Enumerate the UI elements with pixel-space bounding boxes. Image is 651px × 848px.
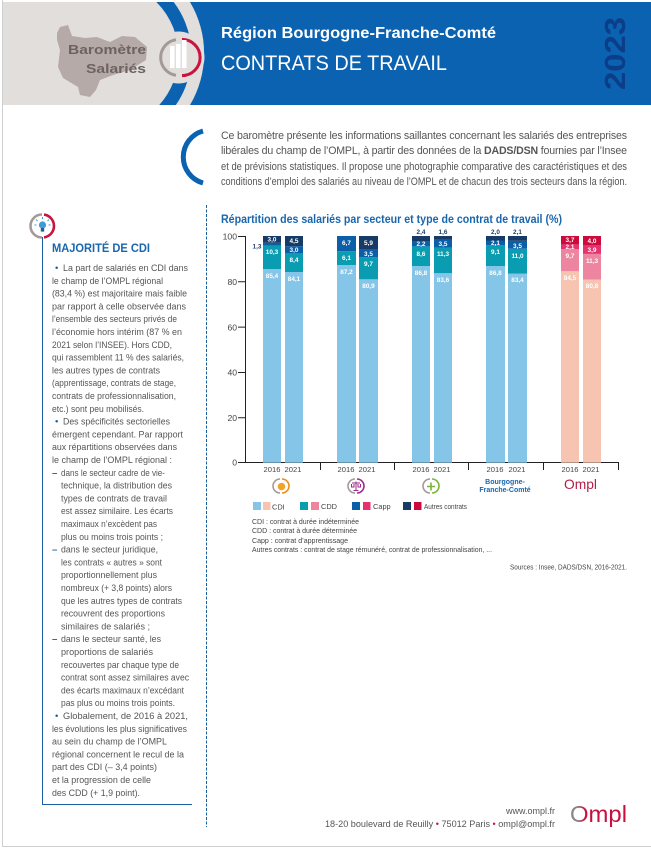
- bars: santé: 86,8: [415, 270, 428, 277]
- bars: Bourgogne-Franche-Comté: 86,8: [489, 270, 502, 277]
- panel text: [52, 263, 189, 799]
- bars: cadre de vie-technique: 1,3: [253, 244, 262, 250]
- panel text: dans le secteur juridique,: [61, 545, 158, 556]
- panel text: part des CDI (– 3,4 points): [52, 762, 157, 773]
- bars: OMPL: 2,1: [566, 244, 575, 251]
- panel text: contrat sont assez similaires avec: [61, 673, 189, 684]
- bars: Bourgogne-Franche-Comté: 2,0: [491, 229, 500, 236]
- bars: cadre de vie-technique: 3,0: [268, 236, 277, 244]
- panel text: Des spécificités sectorielles: [63, 417, 170, 428]
- panel text: (83,4 %) est majoritaire mais faible: [52, 289, 187, 300]
- legend: Capp: [373, 502, 391, 511]
- bars: cadre de vie-technique: 8,4: [290, 257, 299, 264]
- barometer label: [68, 42, 146, 76]
- legend: CDD: [321, 502, 337, 511]
- panel text: La part de salariés en CDI dans: [63, 263, 188, 274]
- panel text: régional concernent le recul de la: [52, 749, 185, 760]
- panel text: technique, la distribution des: [61, 481, 172, 492]
- panel text: plus ou moins trois points ;: [61, 532, 163, 543]
- panel text: •: [55, 711, 58, 722]
- bars: santé: 11,3: [437, 251, 449, 258]
- contract definitions: CDD : contrat à durée déterminée: [252, 526, 357, 535]
- bars: Bourgogne-Franche-Comté: 2,1: [513, 229, 522, 236]
- contract definitions: Autres contrats : contrat de stage rémunéré, contrat de professionnalisation, ...: [252, 545, 492, 554]
- panel text: –: [52, 468, 58, 479]
- bars: Bourgogne-Franche-Comté: 3,5: [513, 243, 522, 250]
- panel text: similaires de salariés ;: [61, 621, 150, 632]
- panel text: les contrats « autres » sont: [61, 557, 162, 568]
- panel text: le champ de l’OMPL régional :: [52, 455, 172, 466]
- panel text: Globalement, de 2016 à 2021,: [63, 711, 188, 722]
- bars: santé: [412, 229, 452, 463]
- sources: Sources : Insee, DADS/DSN, 2016-2021.: [510, 564, 627, 572]
- contract definitions: [252, 517, 492, 554]
- bars: santé: 2,4: [417, 229, 426, 236]
- panel text: et la progression de celle: [52, 775, 151, 786]
- year labels: 2021: [509, 465, 525, 474]
- panel heading: MAJORITÉ DE CDI: [52, 240, 150, 255]
- panel text: par rapport à celle observée dans: [52, 301, 186, 312]
- intro text: Ce baromètre présente les informations saillantes concernant les salariés des entreprises: [221, 130, 627, 142]
- bars: juridique: [337, 236, 378, 463]
- bars: santé: 8,6: [417, 251, 426, 258]
- bars: juridique: 87,2: [340, 269, 353, 276]
- legend: CDI: [272, 502, 285, 512]
- panel text: contrats de professionnalisation,: [52, 391, 176, 402]
- year labels: 2016: [413, 465, 429, 474]
- panel text: les autres types de contrats: [52, 365, 160, 376]
- panel text: dans le secteur cadre de vie-: [61, 468, 165, 479]
- panel text: –: [52, 634, 58, 645]
- bars: Bourgogne-Franche-Comté: 83,4: [511, 277, 524, 284]
- bar chart: [223, 229, 618, 474]
- header banner: [3, 2, 651, 105]
- icon: juridique: [348, 479, 364, 493]
- bars: santé: 1,6: [439, 229, 448, 236]
- footer contact: 18-20 boulevard de Reuilly • 75012 Paris • ompl@ompl.fr: [325, 819, 556, 830]
- year labels: 2021: [583, 465, 599, 474]
- footer contact: [325, 806, 556, 830]
- panel text: les évolutions les plus significatives: [52, 724, 187, 735]
- icon: barometer ring: [161, 39, 200, 76]
- bars: OMPL: [561, 236, 601, 463]
- bars: OMPL: 80,8: [586, 283, 599, 290]
- intro text: [221, 130, 627, 188]
- panel text: des CDD (+ 1,9 point).: [52, 788, 140, 799]
- panel text: recouvrent des proportions: [61, 609, 165, 620]
- panel text: types de contrats de travail: [61, 493, 167, 504]
- panel text: proportionnellement plus: [61, 570, 157, 581]
- y axis: 40: [227, 368, 237, 378]
- panel text: qui rassemblent 11 % des salariés,: [52, 353, 184, 364]
- panel text: –: [52, 545, 58, 556]
- bars: cadre de vie-technique: 84,1: [288, 276, 301, 283]
- panel: majorité de CDI: [30, 214, 192, 804]
- panel text: (apprentissage, contrats de stage,: [52, 378, 176, 389]
- panel text: le champ de l’OMPL régional: [52, 276, 163, 287]
- panel text: proportions de salariés: [61, 647, 153, 658]
- panel text: émergent cependant. Par rapport: [52, 429, 183, 440]
- y axis: 0: [232, 458, 237, 468]
- panel text: est assez similaire. Les écarts: [61, 506, 173, 517]
- document title: CONTRATS DE TRAVAIL: [221, 52, 447, 75]
- panel text: que les autres types de contrats: [61, 596, 182, 607]
- y axis: 100: [223, 232, 237, 242]
- bars: cadre de vie-technique: 85,4: [266, 273, 279, 280]
- panel text: dans le secteur santé, les: [61, 634, 161, 645]
- bars: cadre de vie-technique: 3,0: [290, 247, 299, 254]
- panel text: des écarts maximaux n’excédant: [61, 685, 184, 696]
- bars: Bourgogne-Franche-Comté: 11,0: [511, 253, 524, 260]
- panel text: maximaux n’excèdent pas: [61, 519, 157, 530]
- bars: cadre de vie-technique: [253, 236, 303, 463]
- panel text: au sein du champ de l’OMPL: [52, 737, 168, 748]
- panel text: •: [55, 417, 58, 428]
- y axis: [223, 232, 618, 470]
- bars: Bourgogne-Franche-Comté: 9,1: [491, 249, 500, 256]
- bars: santé: 83,6: [437, 277, 450, 284]
- panel text: recouvertes par chaque type de: [61, 660, 179, 671]
- bars: OMPL: 4,0: [588, 238, 597, 245]
- bars: cadre de vie-technique: 4,5: [290, 238, 299, 245]
- panel text: l’ensemble des secteurs privés de: [52, 314, 177, 325]
- bars: juridique: 6,1: [342, 255, 351, 262]
- logo: OMPL footer: Ompl: [570, 801, 627, 827]
- bars: OMPL: 3,7: [566, 237, 575, 244]
- label: Bourgogne-Franche-Comté: Franche-Comté: [479, 487, 531, 494]
- bars: juridique: 6,7: [342, 240, 351, 247]
- year labels: 2021: [359, 465, 375, 474]
- year labels: 2016: [562, 465, 578, 474]
- panel text: aux répartitions observées dans: [52, 442, 177, 453]
- bars: santé: 2,2: [417, 241, 426, 248]
- year labels: 2016: [264, 465, 280, 474]
- bars: cadre de vie-technique: 10,3: [266, 249, 279, 256]
- legend: Autres contrats: [424, 502, 467, 511]
- region heading: Région Bourgogne-Franche-Comté: [221, 25, 496, 42]
- intro text: libérales du champ de l’OMPL, à partir des données de la DADS/DSN fournies par l’Insee: [221, 145, 627, 157]
- panel text: 2021 selon l’INSEE). Hors CDD,: [52, 340, 172, 351]
- label: Bourgogne-Franche-Comté: Bourgogne-: [485, 479, 525, 486]
- bars: juridique: 5,9: [364, 240, 373, 247]
- bars: OMPL: 3,9: [588, 247, 597, 254]
- footer contact: www.ompl.fr: [505, 806, 556, 817]
- bars: OMPL: 9,7: [566, 253, 575, 260]
- year labels: 2021: [285, 465, 301, 474]
- panel text: nombreux (+ 3,8 points) alors: [61, 583, 172, 594]
- bars: juridique: 3,5: [364, 251, 373, 258]
- barometer label: Baromètre: [68, 42, 146, 57]
- panel text: etc.) sont peu mobilisés.: [52, 404, 144, 415]
- bars: Bourgogne-Franche-Comté: 2,1: [491, 240, 500, 247]
- year labels: 2021: [434, 465, 450, 474]
- icon: santé: [423, 479, 439, 493]
- barometer label: Salariés: [86, 61, 146, 76]
- bars: santé: 3,5: [439, 241, 448, 248]
- bars: Bourgogne-Franche-Comté: [486, 229, 527, 463]
- year labels: 2016: [487, 465, 503, 474]
- bars: juridique: 80,9: [362, 283, 375, 290]
- panel text: •: [55, 263, 58, 274]
- chart title: Répartition des salariés par secteur et type de contrat de travail (%): [221, 212, 562, 226]
- icon: cadre de vie-technique: [273, 479, 289, 493]
- panel text: pas plus ou moins trois points.: [61, 698, 175, 709]
- year labels: [264, 465, 599, 474]
- y axis: 60: [227, 322, 237, 332]
- icon: lightbulb: [30, 214, 54, 238]
- legend: [253, 502, 467, 512]
- icon: region map: [57, 25, 147, 97]
- y axis: 20: [227, 413, 237, 423]
- label: Bourgogne-Franche-Comté: [479, 479, 531, 494]
- icon: intro bracket arc: [183, 131, 203, 183]
- year labels: 2016: [338, 465, 354, 474]
- logo: OMPL in chart: Ompl: [564, 476, 597, 492]
- year: 2023: [600, 17, 632, 90]
- contract definitions: CDI : contrat à durée indéterminée: [252, 517, 359, 526]
- panel text: l’économie hors intérim (87 % en: [52, 327, 182, 338]
- bars: OMPL: 11,3: [586, 258, 598, 265]
- dashed separator: [206, 205, 208, 827]
- bars: juridique: 9,7: [364, 261, 373, 268]
- bars: OMPL: 84,5: [564, 275, 577, 282]
- contract definitions: Capp : contrat d’apprentissage: [252, 536, 348, 545]
- y axis: 80: [227, 277, 237, 287]
